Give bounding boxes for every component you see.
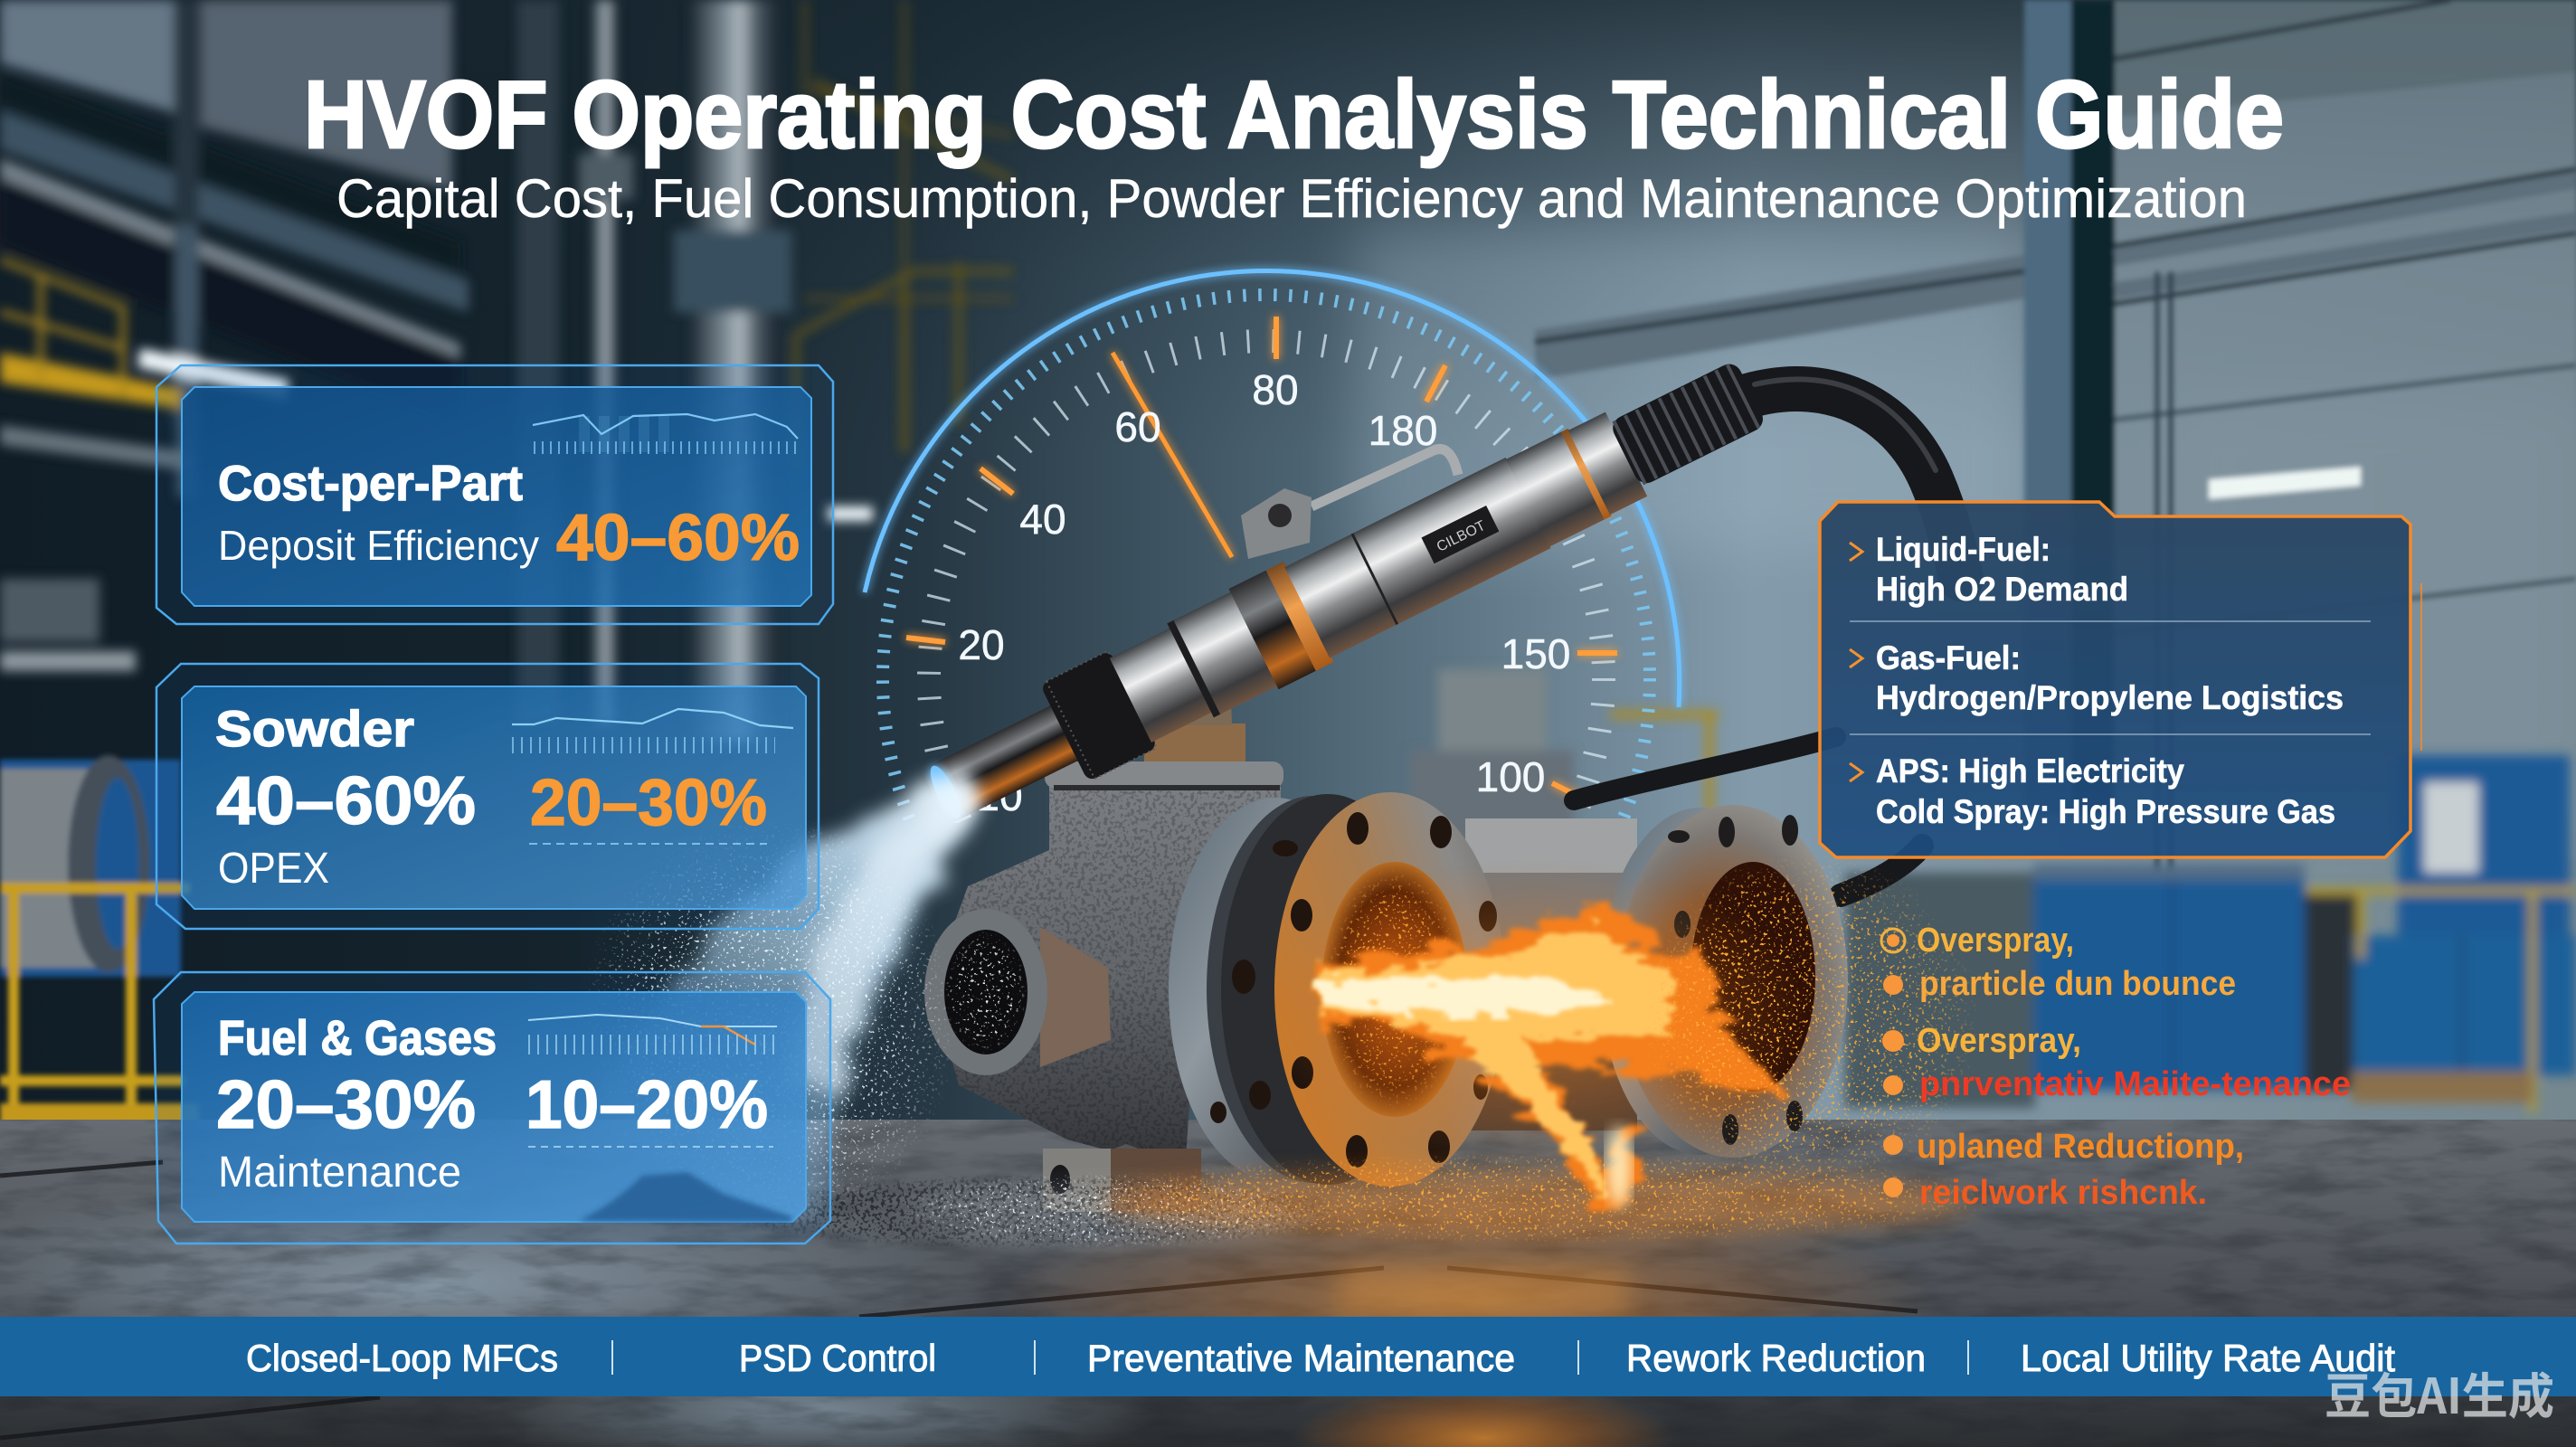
rear flange [1601, 805, 1848, 1158]
gauge numerals: 180 [1368, 407, 1437, 454]
heading: Fuel & Gases [218, 1011, 497, 1065]
floor debris [715, 1153, 2008, 1250]
nozzle tip glow [924, 762, 967, 822]
subtitle: Capital Cost, Fuel Consumption, Powder Efficiency and Maintenance Optimization [336, 168, 2247, 229]
gauge numerals: 80 [1252, 366, 1299, 413]
value: 10–20% [526, 1066, 768, 1142]
bullets [1881, 929, 1905, 1197]
panel: process comparison [1820, 502, 2421, 857]
port opening [924, 909, 1111, 1075]
fuel text: Gas-Fuel: [1876, 639, 2021, 676]
fuel text: High O2 Demand [1876, 571, 2128, 608]
torch handle [1241, 449, 1458, 559]
orange risk list: prarticle dun bounce [1919, 965, 2236, 1003]
gauge numerals: 40 [1019, 496, 1066, 543]
bottom action bar: PSD Control [739, 1337, 936, 1379]
bottom action bar: Rework Reduction [1626, 1337, 1926, 1379]
bottom action bar [0, 1317, 2576, 1396]
bottom action bar: Preventative Maintenance [1087, 1337, 1515, 1379]
orange risk list: Overspray, [1917, 1022, 2081, 1060]
panel: fuel and gases [154, 972, 830, 1244]
gauge numerals: 150 [1501, 630, 1570, 677]
watermark: 豆包AI生成 [2325, 1357, 2554, 1428]
orange risk list [1881, 922, 2351, 1212]
gauge numerals: 60 [1114, 403, 1161, 450]
gauge major ticks [906, 317, 1617, 801]
title: HVOF Operating Cost Analysis Technical Guide [304, 61, 2284, 168]
chevrons [1850, 543, 1862, 781]
hose ribs [1628, 393, 1747, 453]
hoses [1574, 379, 1961, 895]
label: Deposit Efficiency [218, 522, 539, 569]
panel: powder [156, 664, 819, 929]
heading: Cost-per-Part [218, 455, 523, 511]
label: OPEX [218, 845, 329, 893]
bottom action bar: Closed-Loop MFCs [246, 1337, 558, 1379]
main flange [1169, 792, 1506, 1187]
mini chart [512, 709, 793, 844]
torch nameplate [1421, 506, 1499, 563]
flame [1266, 850, 1981, 1207]
value: 20–30% [530, 767, 767, 839]
torch stand [1144, 674, 1245, 761]
torch nameplate: CILBOT [1435, 518, 1488, 555]
fuel text: Cold Spray: High Pressure Gas [1876, 793, 2335, 830]
gauge numerals: 20 [958, 621, 1005, 668]
gauge numerals: 10 [976, 772, 1023, 819]
orange risk list: pnrventativ Maiite-tenance [1919, 1065, 2351, 1103]
powder spray [561, 769, 981, 1230]
label: Maintenance [218, 1149, 461, 1196]
value: 40–60% [556, 502, 800, 574]
mini chart [528, 1015, 777, 1147]
fuel text [1876, 531, 2344, 830]
heading: Sowder [215, 700, 414, 757]
sparks [1637, 850, 1981, 1194]
bottom action bar: Local Utility Rate Audit [2021, 1337, 2395, 1379]
valve body [924, 761, 1283, 1216]
gauge numerals [958, 366, 1570, 819]
panel: cost-per-part [156, 365, 833, 624]
value: 40–60% [216, 762, 476, 838]
orange risk list: reiclwork rishcnk. [1919, 1174, 2207, 1212]
fuel text: APS: High Electricity [1876, 752, 2184, 790]
gauge needle [1113, 353, 1232, 557]
powder mound [579, 1172, 791, 1222]
orange risk list: uplaned Reductionp, [1917, 1128, 2244, 1166]
pipe between flanges [1465, 818, 1637, 1130]
torch: spray gun [913, 342, 1776, 846]
mini chart [533, 414, 798, 448]
orange risk list: Overspray, [1917, 922, 2074, 960]
gauge numerals: 100 [1476, 753, 1545, 800]
fuel text: Liquid-Fuel: [1876, 531, 2050, 568]
gauge: speedometer dial [857, 262, 1688, 823]
value: 20–30% [216, 1066, 476, 1142]
fuel text: Hydrogen/Propylene Logistics [1876, 679, 2344, 716]
